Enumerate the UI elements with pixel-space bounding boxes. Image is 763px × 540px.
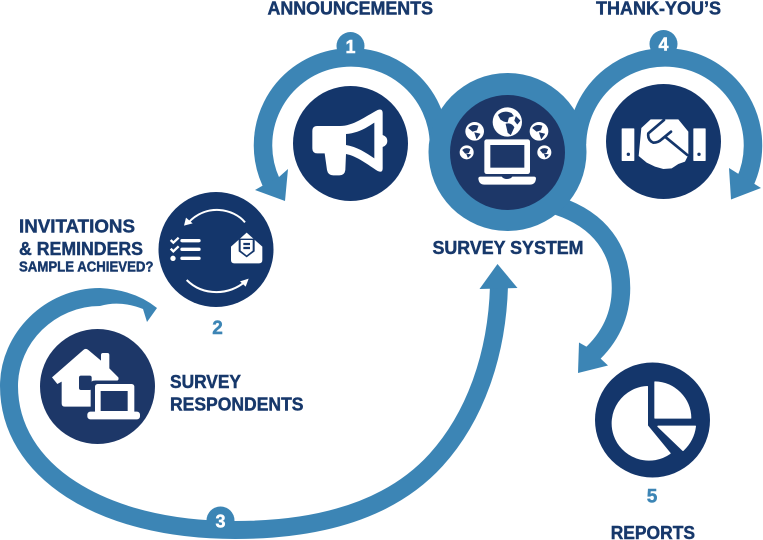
icon: pie chart: [612, 382, 695, 460]
heading: invitations and reminders: [19, 216, 154, 276]
icon: laptop and globes: [460, 107, 551, 185]
heading: survey respondents: RESPONDENTS: [170, 395, 304, 415]
heading: survey respondents: SURVEY: [170, 372, 241, 392]
heading: invitations and reminders: SAMPLE ACHIEVED?: [19, 260, 154, 276]
arrow 3: respondents to system: [9, 264, 518, 534]
icon: handshake: [622, 119, 706, 169]
icon: house and laptop: [52, 349, 140, 419]
heading: invitations and reminders: & REMINDERS: [19, 239, 143, 259]
arrow 1: system to invitations: [255, 32, 439, 201]
icon: megaphone: [312, 109, 387, 175]
number 2: 2: [212, 318, 223, 339]
circle: reports: [595, 362, 710, 478]
arrow 1: system to invitations: 1: [345, 37, 356, 57]
arrow 3: respondents to system: 3: [215, 512, 226, 532]
circle: invitations: [158, 192, 274, 307]
survey system ring: [428, 73, 586, 231]
number 5: 5: [647, 487, 658, 508]
icon: cycle, checklist and envelope: [170, 210, 262, 292]
arrow 5: system to reports: [558, 206, 621, 373]
arrow 4: system to thank-you: 4: [658, 34, 669, 54]
circle: respondents: [40, 329, 155, 444]
arrow 4: system to thank-you: [577, 30, 761, 200]
heading: survey system: SURVEY SYSTEM: [432, 238, 584, 258]
heading: survey respondents: [170, 372, 304, 415]
circle: thank-you: [606, 84, 721, 199]
heading: invitations and reminders: INVITATIONS: [19, 216, 135, 236]
circle: survey system: [450, 95, 565, 210]
circle: announcements: [293, 86, 408, 201]
